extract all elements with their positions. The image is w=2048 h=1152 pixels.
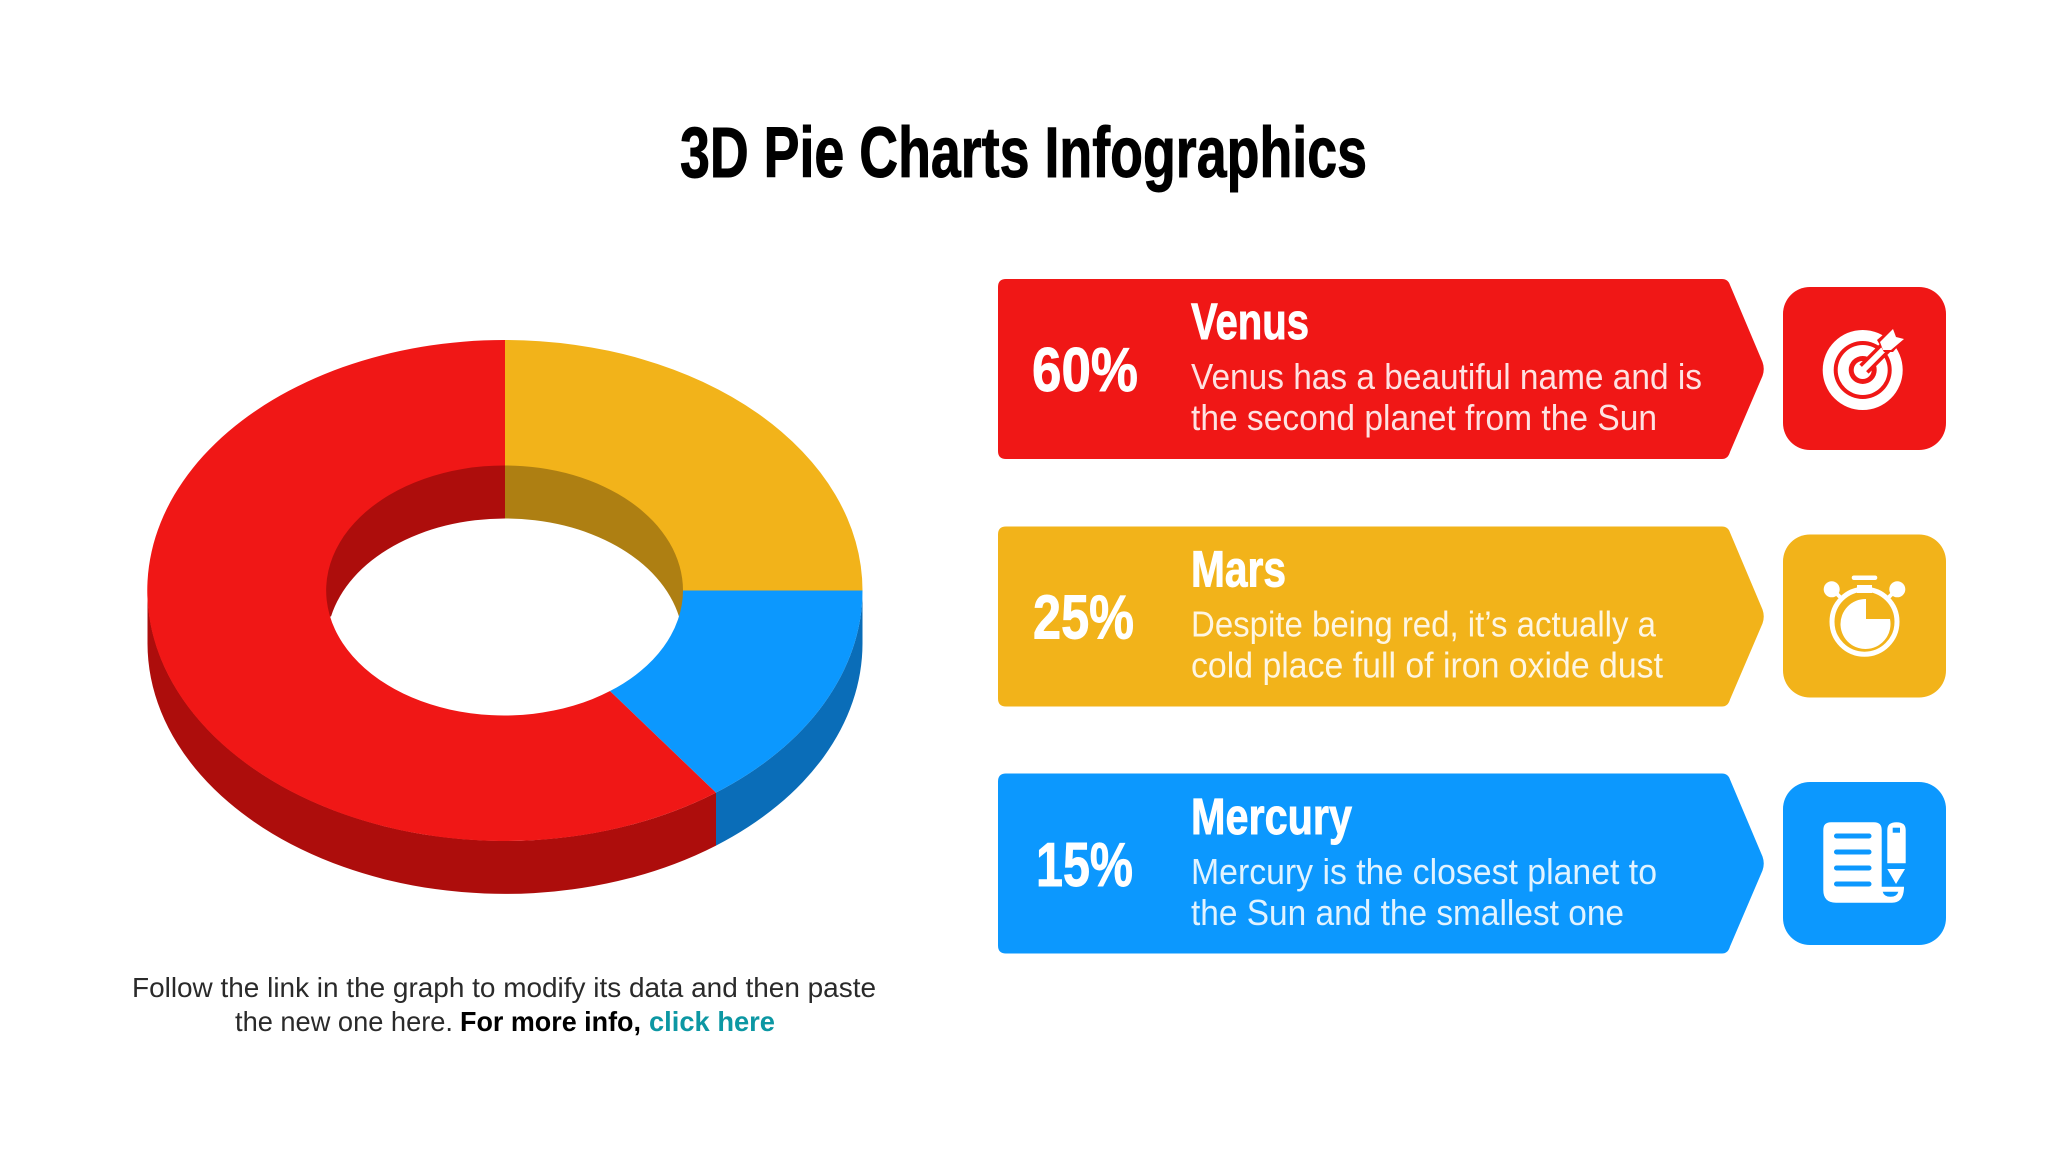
chart note: For more info, <box>460 1006 641 1037</box>
description: mercury: the Sun and the smallest one <box>1191 892 1624 933</box>
name: venus: Venus <box>1191 293 1309 350</box>
description: mercury: Mercury is the closest planet to <box>1191 851 1657 892</box>
icon tile: document and pencil <box>1783 782 1946 945</box>
description: mars <box>1191 604 1663 686</box>
name: mercury: Mercury <box>1191 788 1353 845</box>
description: mercury <box>1191 851 1657 933</box>
side wall: venus <box>148 590 716 894</box>
arrow banner: mars <box>998 526 1764 706</box>
name: mars: Mars <box>1191 540 1286 598</box>
chart note: the new one here. <box>235 1006 453 1037</box>
description: mars: cold place full of iron oxide dust <box>1191 644 1663 686</box>
arrow banner: venus <box>998 279 1764 459</box>
arrow banner: mercury <box>998 774 1764 954</box>
row: venus <box>998 279 1946 459</box>
icon tile: target <box>1783 287 1946 450</box>
chart note <box>132 972 876 1037</box>
percentage: mercury: 15% <box>1036 831 1133 900</box>
row: mercury <box>998 774 1946 954</box>
slice: venus 60% <box>147 340 716 841</box>
inner wall: venus <box>320 460 505 616</box>
percentage: venus: 60% <box>1032 336 1138 405</box>
chart note: click here <box>649 1006 775 1037</box>
description: venus: the second planet from the Sun <box>1191 397 1657 438</box>
description: venus: Venus has a beautiful name and is <box>1191 356 1702 397</box>
row: mars <box>998 526 1946 706</box>
slice: mercury 15% <box>610 590 862 793</box>
percentage: mars: 25% <box>1033 584 1134 652</box>
side wall: mercury <box>716 590 862 846</box>
title: 3D Pie Charts Infographics <box>680 114 1367 193</box>
description: venus <box>1191 356 1702 438</box>
slice: mars 25% <box>505 340 862 590</box>
icon tile: stopwatch <box>1783 534 1946 698</box>
description: mars: Despite being red, it’s actually a <box>1191 604 1657 644</box>
chart note: Follow the link in the graph to modify its data and then paste <box>132 972 876 1003</box>
inner wall: mars <box>505 460 690 616</box>
3D donut chart <box>147 340 862 894</box>
